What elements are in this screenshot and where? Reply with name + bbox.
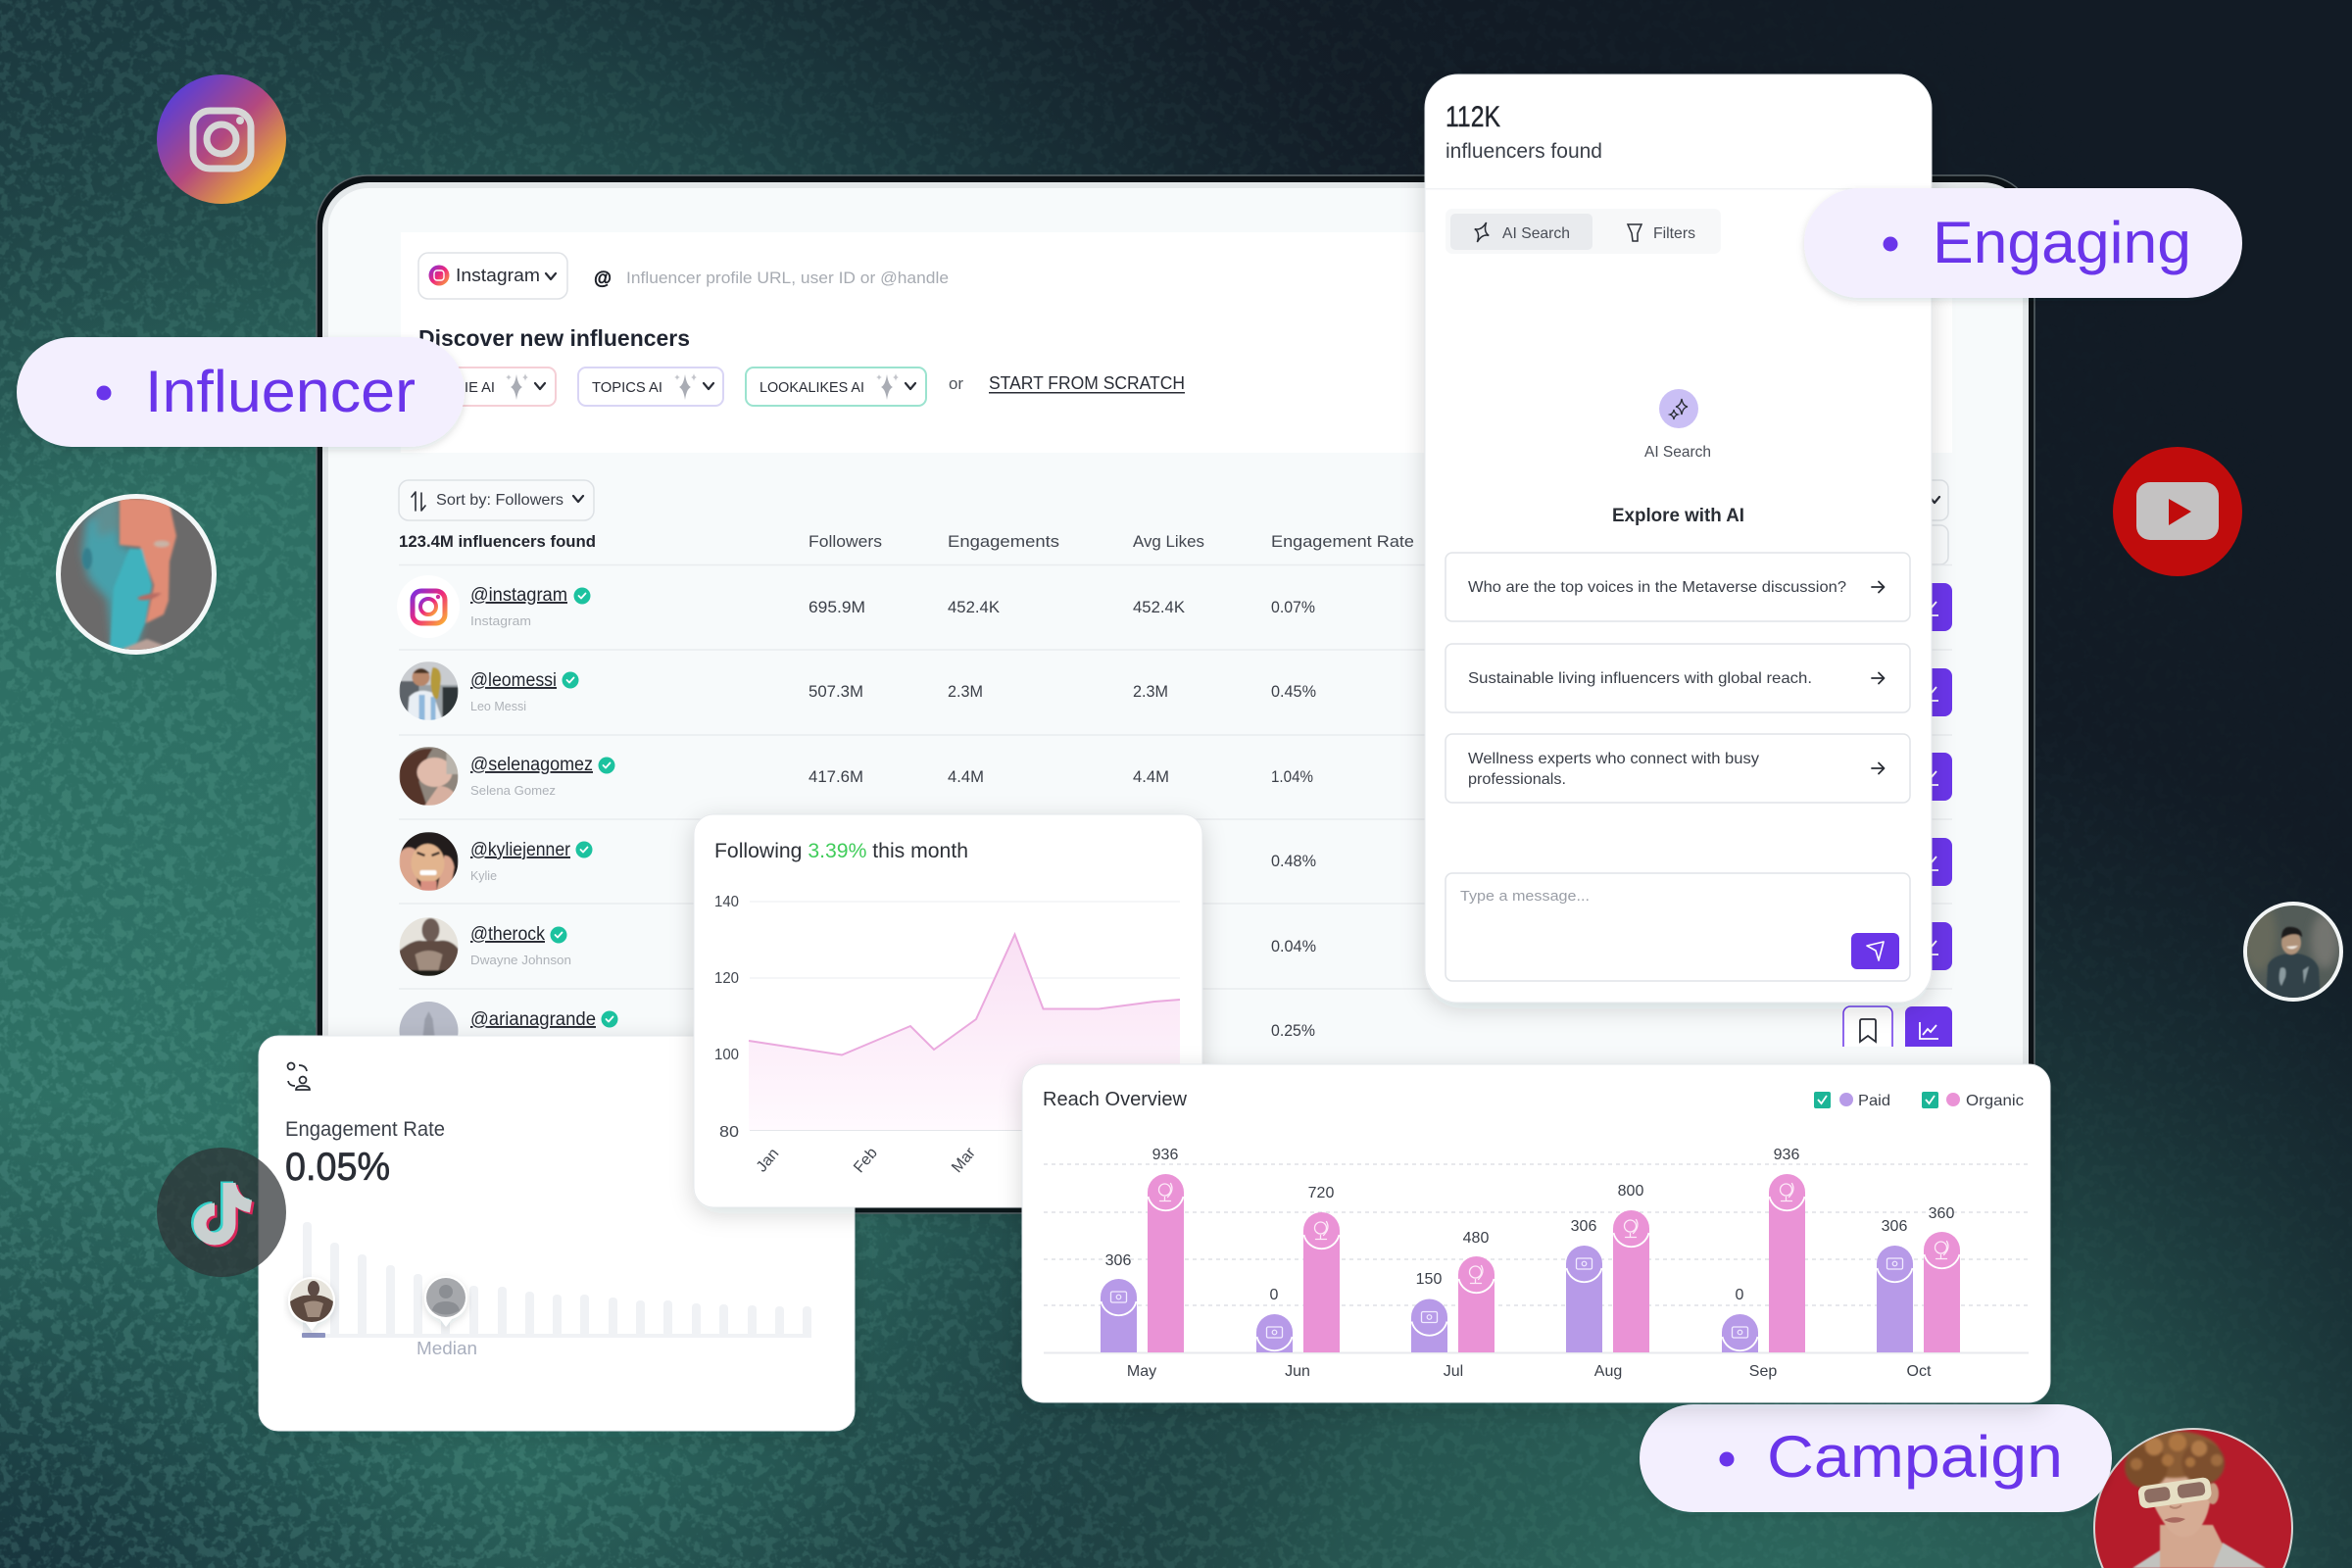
stat: 112K influencers found <box>1446 101 1602 163</box>
line chart: following trend: 140 <box>714 894 739 910</box>
avatar: Ariana <box>400 1002 459 1035</box>
row: instagram: @instagram <box>470 585 567 606</box>
avatar: Selena <box>400 747 459 806</box>
row: arianagrande <box>400 1002 1952 1047</box>
row: kyliejenner: Kylie <box>470 868 497 883</box>
panel: campaign pill label: Campaign <box>1767 1424 2063 1490</box>
stat: 112K influencers found: 112K <box>1446 101 1500 133</box>
row: leomessi: Leo Messi <box>470 699 526 713</box>
row: selenagomez: 417.6M <box>808 767 863 786</box>
filter chip: topics AI <box>578 368 723 406</box>
line chart: following trend: 100 <box>714 1047 739 1063</box>
filter chip: profile AI <box>431 368 556 406</box>
bars: Oct: 360 <box>1929 1205 1954 1222</box>
filter chip: lookalikes AI: LOOKALIKES AI <box>760 379 864 396</box>
avatar: Kylie <box>400 832 459 891</box>
icon: Instagram circle badge <box>157 74 286 204</box>
legend: paid and organic: Organic <box>1966 1093 2024 1109</box>
bars: May: 306 <box>1105 1252 1131 1269</box>
line chart: following trend: Feb <box>851 1145 881 1176</box>
bars: Aug: 306 <box>1571 1218 1596 1235</box>
label: Median: Median <box>416 1339 477 1358</box>
stat: 112K influencers found: influencers found <box>1446 140 1602 163</box>
marker: median pin <box>424 1276 467 1327</box>
bars: Jul: Jul <box>1444 1363 1463 1380</box>
panel: AI search <box>1425 74 1932 1003</box>
bars: May: May <box>1127 1363 1156 1380</box>
table: influencer results <box>397 480 1952 1065</box>
line chart: following trend: Mar <box>949 1145 979 1176</box>
label: AI Search: AI Search <box>1644 444 1711 461</box>
table header row: Engagement Rate <box>1271 532 1414 551</box>
bookmark button <box>1842 1005 1893 1047</box>
bars: Jun <box>1256 1185 1340 1380</box>
bars: May <box>1101 1147 1184 1380</box>
panel: influencer search header <box>401 232 1952 453</box>
stat: 0.05%: 0.05% <box>285 1146 390 1189</box>
row: selenagomez <box>400 747 1952 806</box>
heading: Explore with AI: Explore with AI <box>1612 506 1744 526</box>
row: leomessi: @leomessi <box>470 670 557 691</box>
sort dropdown <box>399 480 594 520</box>
message input <box>1446 873 1910 981</box>
table header row: Avg Likes <box>1133 532 1204 551</box>
panel: engaging pill label <box>1804 188 2242 298</box>
row: instagram <box>410 583 1952 631</box>
search input placeholder: Influencer profile URL, user ID or @handle <box>626 269 949 287</box>
row: selenagomez: 1.04% <box>1271 767 1313 786</box>
tabs: AI Search and Filters: Filters <box>1653 225 1695 242</box>
marker: creator position pin <box>288 1277 335 1338</box>
icon: YouTube circle badge <box>2113 447 2242 576</box>
row: arianagrande: 0.25% <box>1271 1021 1315 1040</box>
icon: TikTok circle badge <box>157 1148 286 1277</box>
row: leomessi: 2.3M <box>1133 682 1168 701</box>
row: instagram: 452.4K <box>1133 598 1186 616</box>
prompt card: Metaverse <box>1446 553 1910 621</box>
filter chip: lookalikes AI <box>746 368 926 406</box>
line chart: following trend: 80 <box>719 1124 739 1141</box>
heading: discover new influencers: Discover new influencers <box>418 325 690 351</box>
panel: influencer pill label: Influencer <box>145 359 416 424</box>
row: selenagomez: 4.4M <box>1133 767 1169 786</box>
icon: AI sparkle badge <box>1659 389 1698 428</box>
bars: Sep <box>1722 1147 1805 1380</box>
row: therock <box>400 917 1952 976</box>
panel: campaign pill label <box>1640 1404 2112 1512</box>
row: instagram: 695.9M <box>808 598 865 616</box>
bars: Jun: 0 <box>1270 1287 1279 1303</box>
table controls at right <box>1933 479 1949 564</box>
line chart: following trend: 120 <box>714 970 739 987</box>
line chart: following trend <box>714 894 1180 1176</box>
prompt card: wellness experts <box>1446 734 1910 803</box>
row: instagram: Instagram <box>470 613 531 628</box>
avatar: bottom right man in sunglasses <box>2093 1428 2293 1568</box>
bars: Oct: Oct <box>1907 1363 1932 1380</box>
analytics button <box>1905 1006 1952 1047</box>
bars: Jun: 720 <box>1308 1185 1334 1201</box>
bars: Jul <box>1411 1230 1494 1380</box>
sort dropdown: Sort by: Followers <box>436 492 564 509</box>
table header row: 123.4M influencers found <box>399 532 596 551</box>
bars: Jun: Jun <box>1285 1363 1310 1380</box>
avatar: Messi <box>400 662 459 720</box>
table header row: Engagements <box>948 532 1059 551</box>
row: therock: 0.04% <box>1271 937 1316 956</box>
row: instagram: 0.07% <box>1271 598 1315 616</box>
prompt card: wellness experts: professionals. <box>1468 771 1566 788</box>
row: leomessi <box>400 662 1952 720</box>
avatar: Instagram logo <box>410 588 447 625</box>
bars: Oct <box>1877 1205 1960 1380</box>
histogram: engagement rate distribution <box>303 1222 811 1338</box>
legend: paid and organic <box>1814 1092 2024 1109</box>
tabs: AI Search and Filters <box>1446 209 1721 254</box>
platform dropdown: Instagram: Instagram <box>456 266 540 285</box>
line chart: following trend: Jan <box>754 1146 782 1175</box>
legend: paid and organic: Paid <box>1858 1093 1890 1109</box>
bars: Jul: 150 <box>1416 1271 1442 1288</box>
prompt card: wellness experts: Wellness experts who connect with busy <box>1468 751 1759 767</box>
avatar: right smiling man <box>2243 902 2343 1002</box>
avatar: left portrait with teal and salmon lighting <box>54 490 220 659</box>
bars: Sep: 936 <box>1774 1147 1799 1163</box>
row: kyliejenner <box>400 832 1952 891</box>
filter chip: topics AI: TOPICS AI <box>592 379 662 396</box>
heading: following this month: Following 3.39% this month <box>714 840 968 862</box>
bars: May: 936 <box>1152 1147 1178 1163</box>
bars: Sep: 0 <box>1736 1287 1744 1303</box>
bars: Sep: Sep <box>1749 1363 1777 1380</box>
panel: engaging pill label: Engaging <box>1933 210 2191 275</box>
row: therock: @therock <box>470 924 545 945</box>
row: therock: Dwayne Johnson <box>470 953 571 967</box>
bars: Aug: Aug <box>1594 1363 1622 1380</box>
tabs: AI Search and Filters: AI Search <box>1502 225 1570 242</box>
heading: Reach Overview: Reach Overview <box>1043 1089 1188 1110</box>
row: leomessi: 2.3M <box>948 682 983 701</box>
message input: Type a message... <box>1460 888 1590 905</box>
panel: following trend card <box>694 814 1202 1207</box>
filter chip: profile AI: IE AI <box>465 379 495 396</box>
prompt card: Metaverse: Who are the top voices in the Metaverse discussion? <box>1468 579 1846 596</box>
bars: Aug <box>1566 1183 1649 1380</box>
bars: Oct: 306 <box>1882 1218 1907 1235</box>
text: or: or <box>949 374 963 393</box>
icon: engagement people swap <box>288 1062 310 1090</box>
row: kyliejenner: @kyliejenner <box>470 840 571 860</box>
table header row <box>400 535 1413 551</box>
row: leomessi: 0.45% <box>1271 682 1316 701</box>
row: selenagomez: @selenagomez <box>470 755 593 775</box>
panel: reach overview card <box>1022 1064 2050 1402</box>
prompt card: sustainable living <box>1446 644 1910 712</box>
table header row: Followers <box>808 532 882 551</box>
prompt card: sustainable living: Sustainable living influencers with global reach. <box>1468 670 1812 687</box>
row: kyliejenner: 0.48% <box>1271 852 1316 870</box>
avatar: The Rock <box>400 917 459 976</box>
row: selenagomez: Selena Gomez <box>470 783 556 798</box>
panel: engagement rate card <box>259 1036 855 1431</box>
row: instagram: 452.4K <box>948 598 1001 616</box>
tablet device frame <box>317 175 2034 1213</box>
panel: influencer pill label <box>17 337 465 447</box>
platform dropdown: Instagram <box>418 253 567 299</box>
link: start from scratch: START FROM SCRATCH <box>989 373 1185 393</box>
row: arianagrande: @arianagrande <box>470 1009 596 1030</box>
bars: Jul: 480 <box>1463 1230 1489 1247</box>
row: selenagomez: 4.4M <box>948 767 984 786</box>
text: Engagement Rate: Engagement Rate <box>285 1118 445 1141</box>
search input placeholder: @ <box>594 269 612 289</box>
row: leomessi: 507.3M <box>808 682 863 701</box>
bars: Aug: 800 <box>1618 1183 1643 1200</box>
bar chart: paid versus organic reach <box>1044 1147 2029 1380</box>
